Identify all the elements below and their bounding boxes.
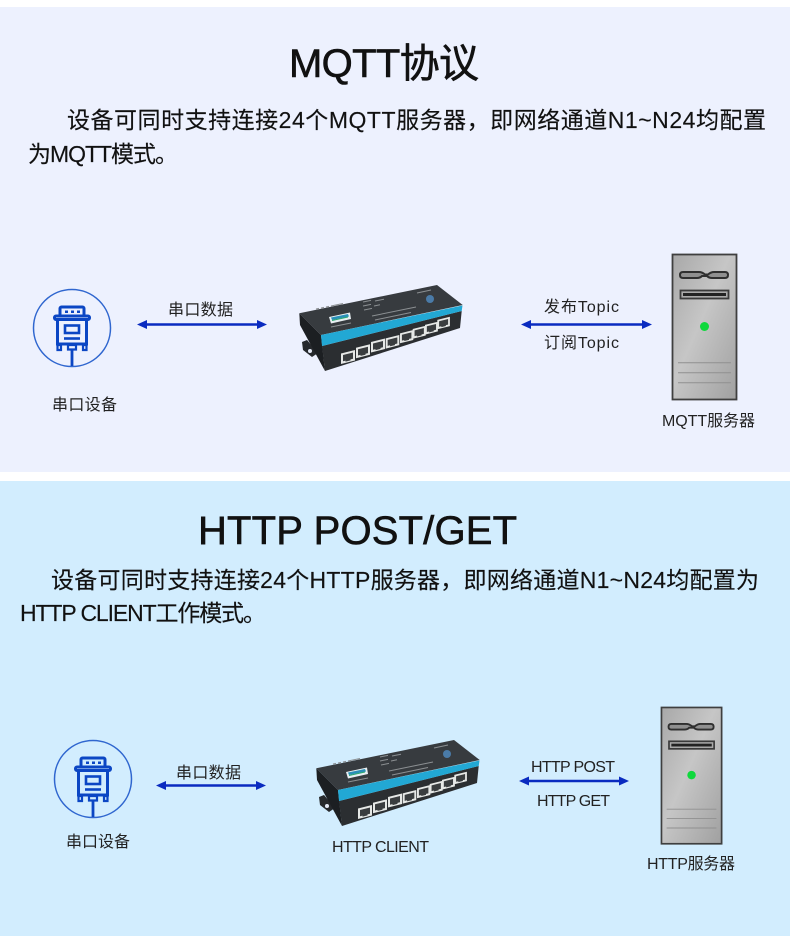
label: HTTP POST: HTTP POST (531, 759, 615, 776)
label: serial data: 串口数据 (176, 764, 241, 782)
panel: MQTT protocol (0, 7, 790, 472)
arrow: HTTP request (519, 776, 629, 786)
icon: serial gateway device (299, 285, 463, 371)
heading: MQTT协议: MQTT协议 (289, 42, 479, 86)
text block: HTTP description: HTTP CLIENT工作模式。 (20, 600, 266, 626)
arrow: publish and subscribe (521, 320, 652, 329)
label: subscribe topic: 订阅Topic (544, 334, 619, 352)
icon: MQTT server (672, 254, 736, 400)
label: HTTP server: HTTP服务器 (647, 855, 735, 873)
icon: serial device (54, 740, 132, 818)
text block: HTTP description (20, 567, 759, 626)
text block: MQTT description (28, 107, 766, 167)
label: serial data: 串口数据 (168, 301, 233, 319)
panel: HTTP POST/GET (0, 481, 790, 936)
label: HTTP client: HTTP CLIENT (332, 839, 429, 856)
icon: HTTP server (661, 707, 722, 844)
label: serial device: 串口设备 (52, 396, 117, 414)
icon: serial gateway device (316, 740, 480, 826)
text block: HTTP description: 设备可同时支持连接24个HTTP服务器，即网络通道N1~N24均配置为 (51, 567, 759, 593)
label: publish topic: 发布Topic (544, 298, 619, 316)
heading: HTTP POST/GET: HTTP POST/GET (198, 509, 517, 553)
label: MQTT server: MQTT服务器 (662, 412, 755, 430)
label: HTTP GET: HTTP GET (537, 793, 610, 810)
icon: serial device (34, 290, 110, 366)
label: serial device: 串口设备 (66, 833, 130, 851)
arrow: serial data (137, 320, 267, 329)
text block: MQTT description: 设备可同时支持连接24个MQTT服务器，即网络通道N1~N24均配置 (67, 107, 766, 133)
text block: MQTT description: 为MQTT模式。 (28, 141, 178, 167)
arrow: serial data (156, 781, 266, 790)
